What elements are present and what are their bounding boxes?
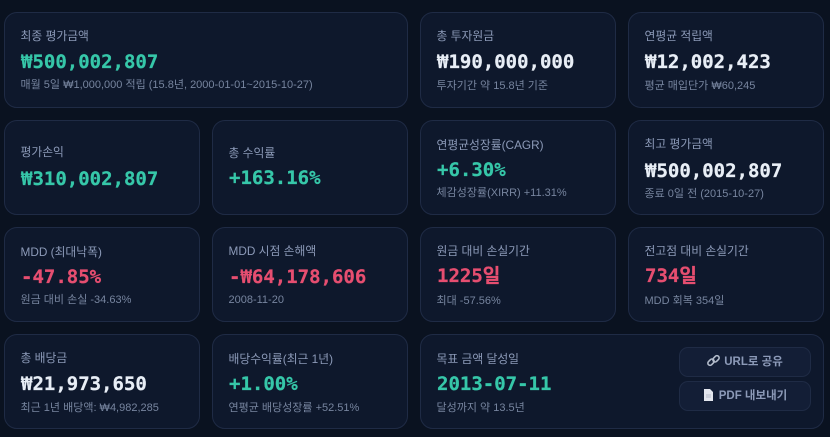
label: 전고점 대비 손실기간 [644, 244, 749, 258]
note: 평균 매입단가 ₩60,245 [644, 80, 755, 92]
value: 734일 [645, 265, 697, 287]
card: CAGR [420, 120, 616, 215]
label: 연평균 적립액 [644, 29, 713, 43]
note: 투자기간 약 15.8년 기준 [436, 80, 548, 92]
card: final value [4, 12, 408, 108]
label: 연평균성장률(CAGR) [436, 138, 544, 152]
value: +1.00% [229, 373, 298, 395]
value: +163.16% [229, 167, 321, 189]
label: 목표 금액 달성일 [436, 352, 519, 366]
value: ₩12,002,423 [645, 51, 771, 73]
card: underwater vs principal [420, 227, 616, 322]
label: 원금 대비 손실기간 [436, 244, 530, 258]
label: 총 투자원금 [436, 29, 494, 43]
card: MDD [4, 227, 200, 322]
label: 총 수익률 [228, 146, 275, 160]
card: annual contribution [628, 12, 824, 108]
note: 매월 5일 ₩1,000,000 적립 (15.8년, 2000-01-01~2015-10-27) [20, 79, 313, 91]
value: -47.85% [21, 266, 101, 288]
note: MDD 회복 354일 [644, 295, 724, 307]
button: share URL [679, 347, 811, 377]
label: 총 배당금 [20, 351, 67, 365]
card: total return [212, 120, 408, 215]
note: 원금 대비 손실 -34.63% [20, 294, 131, 306]
value: 1225일 [437, 265, 500, 287]
label: 배당수익률(최근 1년) [228, 352, 333, 366]
value: ₩190,000,000 [437, 51, 574, 73]
note: 체감성장률(XIRR) +11.31% [436, 187, 567, 199]
card: goal date [420, 334, 824, 429]
card: profit [4, 120, 200, 215]
note: 최대 -57.56% [436, 295, 501, 307]
label: 최고 평가금액 [644, 137, 713, 151]
note: 2008-11-20 [228, 294, 284, 306]
label: 최종 평가금액 [20, 29, 89, 43]
card: total principal [420, 12, 616, 108]
note: 종료 0일 전 (2015-10-27) [644, 188, 764, 200]
note: 최근 1년 배당액: ₩4,982,285 [20, 402, 159, 414]
label: MDD 시점 손해액 [228, 244, 316, 258]
card: peak value [628, 120, 824, 215]
card: dividend yield [212, 334, 408, 429]
label: 평가손익 [20, 145, 64, 159]
value: 2013-07-11 [437, 373, 551, 395]
button: export PDF [679, 381, 811, 411]
value: ₩500,002,807 [21, 51, 158, 73]
label: MDD (최대낙폭) [20, 245, 102, 259]
note: 달성까지 약 13.5년 [436, 402, 525, 414]
value: ₩21,973,650 [21, 373, 147, 395]
value: -₩64,178,606 [229, 266, 366, 288]
card: total dividends [4, 334, 200, 429]
button: export PDF: PDF 내보내기 [719, 390, 787, 402]
button: share URL: URL로 공유 [724, 356, 783, 368]
note: 연평균 배당성장률 +52.51% [228, 402, 359, 414]
card: MDD loss amount [212, 227, 408, 322]
card: underwater vs peak [628, 227, 824, 322]
value: ₩310,002,807 [21, 168, 158, 190]
value: +6.30% [437, 159, 506, 181]
value: ₩500,002,807 [645, 160, 782, 182]
